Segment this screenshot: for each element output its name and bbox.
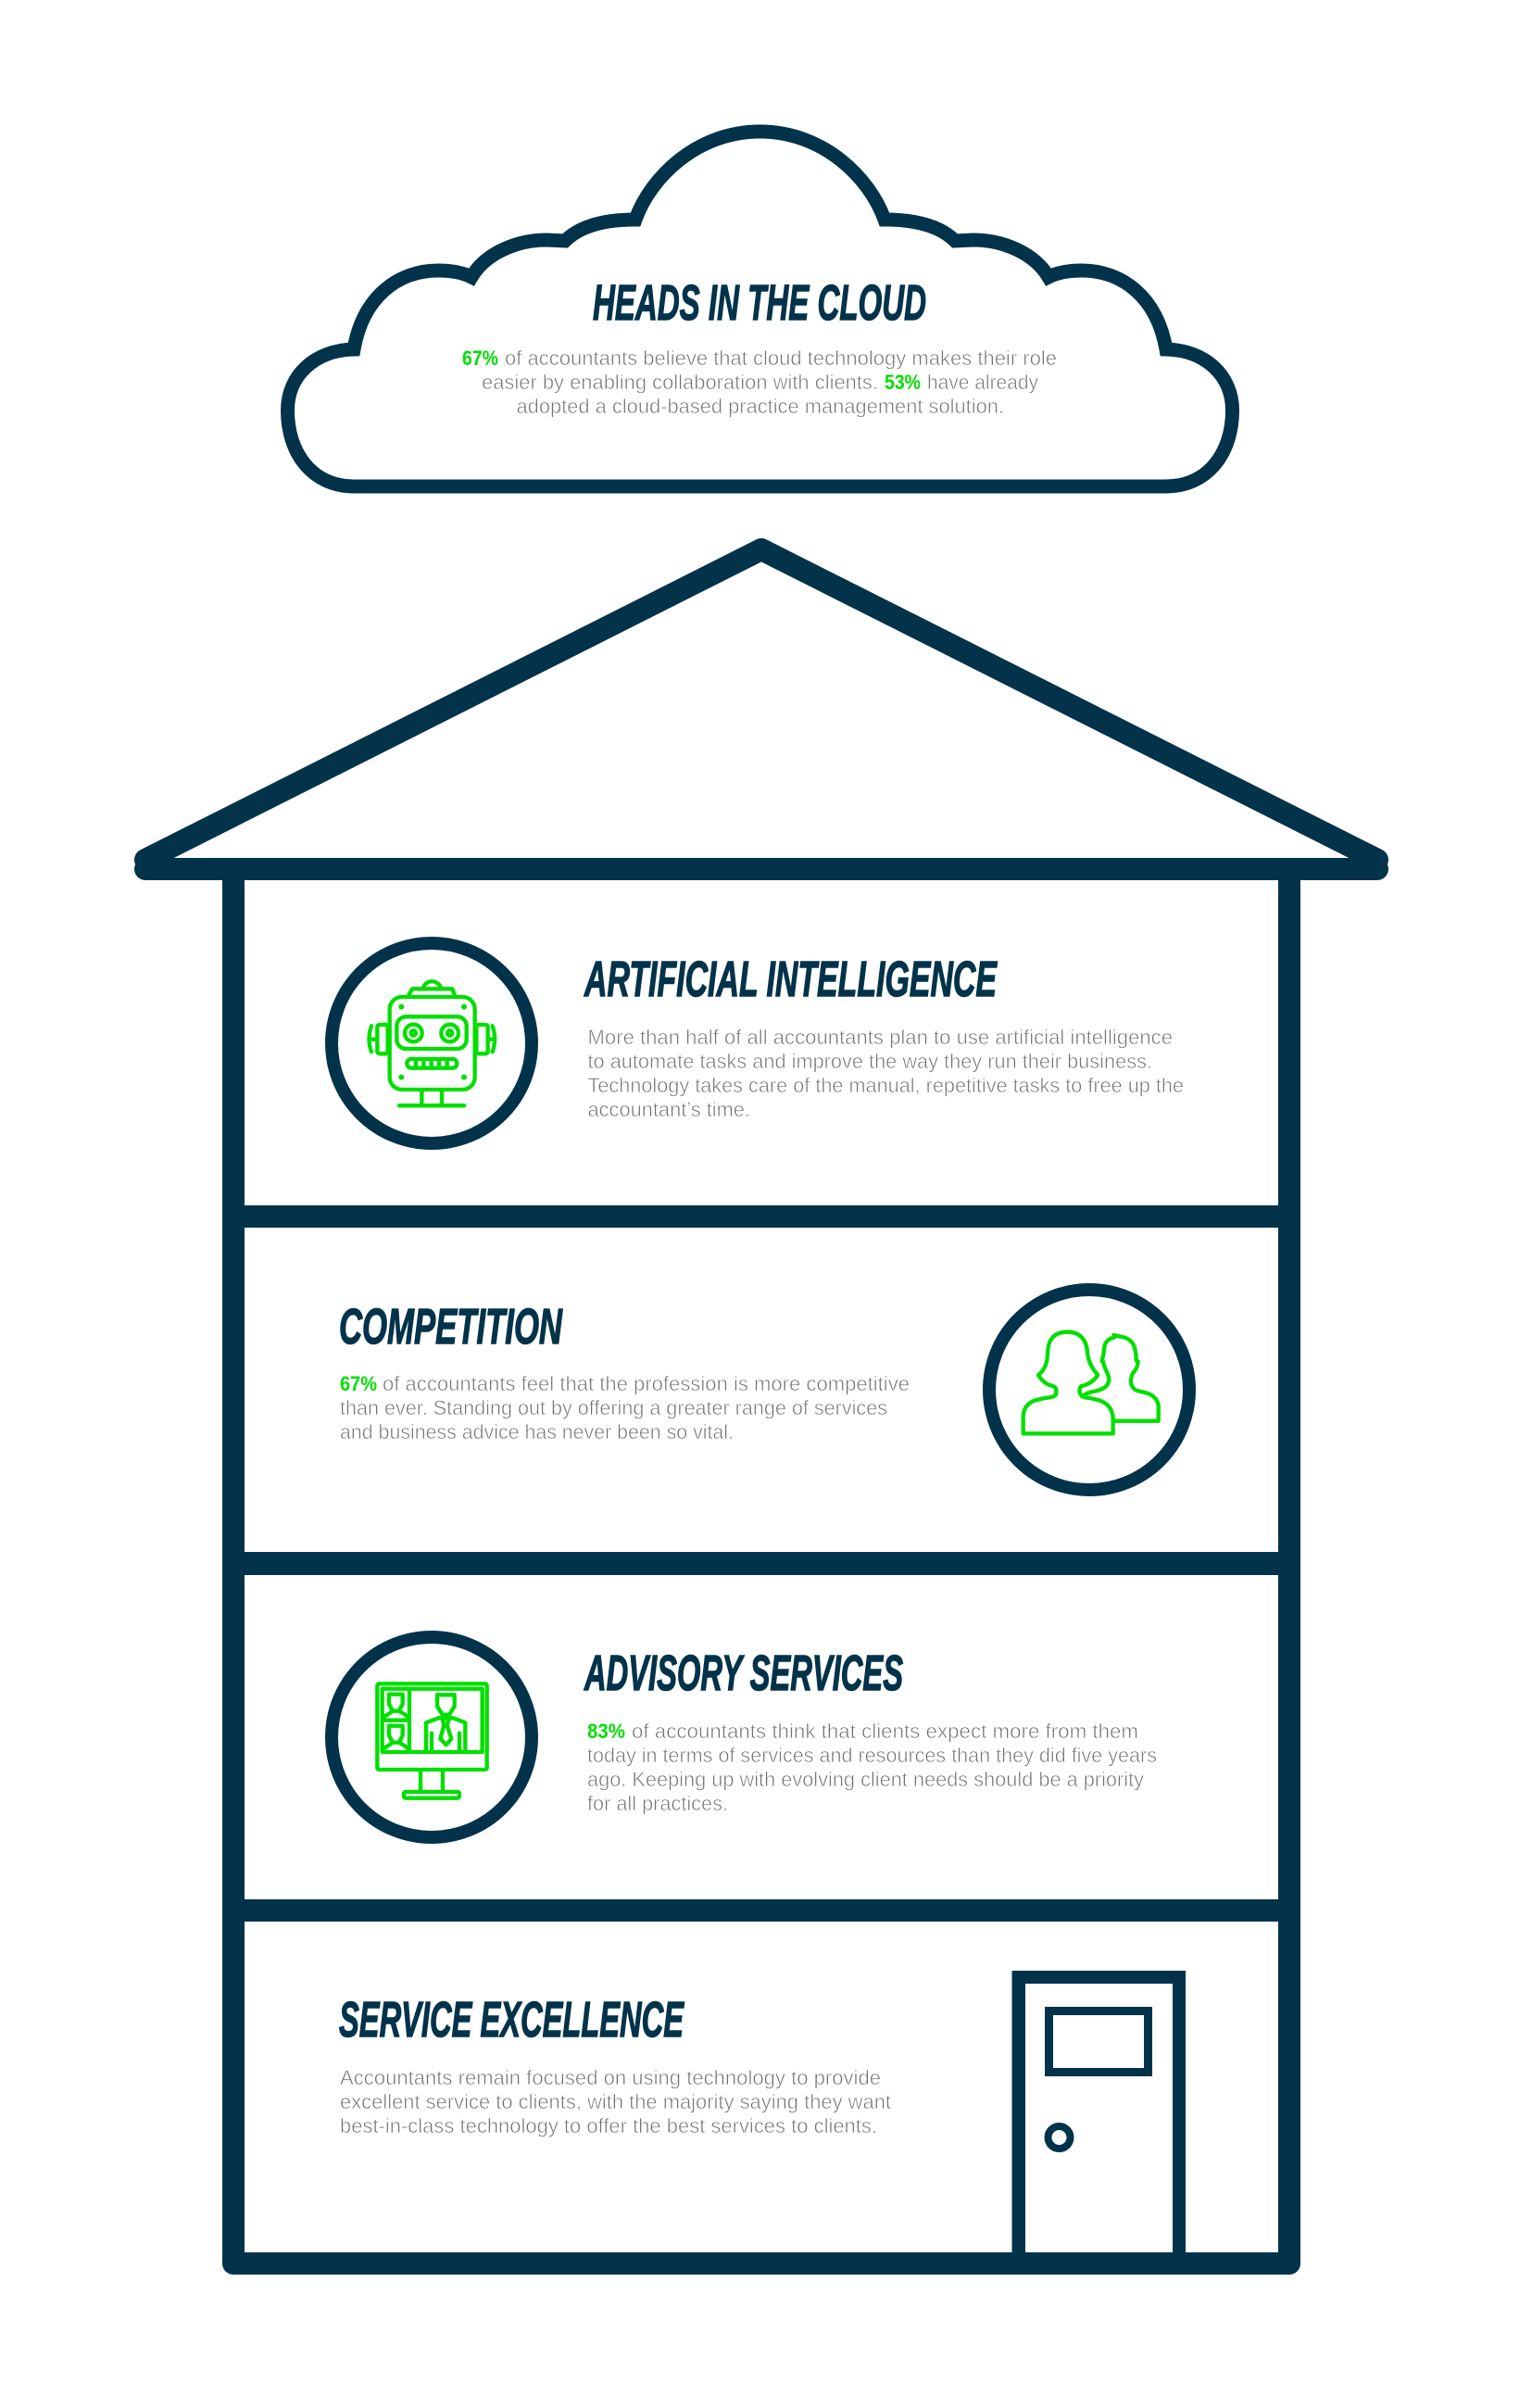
text block: service excellence: [340, 2066, 891, 2137]
roof outline: [145, 549, 1377, 869]
text block: service excellence: Accountants remain focused on using technology to provide: [340, 2066, 881, 2089]
text block: competition: [340, 1372, 910, 1444]
text block: artificial intelligence: [587, 1026, 1184, 1121]
text block: artificial intelligence: Technology takes care of the manual, repetitive tasks to free up the: [587, 1074, 1184, 1097]
panel: service excellence: [339, 1971, 1186, 2253]
text block: competition: 67%: [340, 1372, 377, 1395]
panel: cloud: [287, 132, 1232, 486]
cloud text block: of accountants believe that cloud technology makes their role: [505, 347, 1057, 370]
floor dividers: [233, 1205, 1289, 1922]
cloud text block: 53%: [885, 371, 921, 394]
text block: artificial intelligence: accountant’s time.: [587, 1098, 750, 1121]
cloud text block: easier by enabling collaboration with clients.: [482, 371, 878, 394]
text block: service excellence: best-in-class technology to offer the best services to clients.: [340, 2114, 877, 2137]
cloud heading: HEADS IN THE CLOUD: [593, 275, 926, 331]
cloud outline: [287, 132, 1232, 486]
text block: advisory services: 83%: [587, 1720, 625, 1743]
text block: artificial intelligence: to automate tasks and improve the way they run their business.: [587, 1050, 1152, 1073]
house structure: [145, 549, 1377, 2263]
door window: [1045, 2007, 1152, 2076]
text block: advisory services: ago. Keeping up with evolving client needs should be a priority: [587, 1768, 1144, 1791]
heading: artificial intelligence: ARTIFICIAL INTELLIGENCE: [584, 952, 998, 1007]
icon: door: [1011, 1971, 1186, 2253]
icon: video call monitor in circle: [332, 1637, 532, 1837]
walls and ground floor: [233, 869, 1289, 2263]
heading: service excellence: SERVICE EXCELLENCE: [339, 1992, 684, 2048]
text block: advisory services: [587, 1720, 1157, 1815]
panel: competition: [339, 1290, 1189, 1490]
icon: two people in circle: [989, 1290, 1189, 1490]
cloud text block: have already: [927, 371, 1038, 394]
door knob: [1049, 2126, 1071, 2149]
text block: service excellence: excellent service to clients, with the majority saying they want: [340, 2090, 891, 2113]
panel: advisory services: [332, 1637, 1157, 1837]
cloud text block: 67%: [462, 347, 498, 370]
icon: robot in circle: [332, 943, 532, 1143]
text block: advisory services: today in terms of services and resources than they did five years: [587, 1744, 1157, 1767]
text block: advisory services: for all practices.: [587, 1792, 728, 1815]
text block: artificial intelligence: More than half of all accountants plan to use artificial intelligence: [587, 1026, 1173, 1049]
cloud text block: [462, 347, 1057, 418]
panel: artificial intelligence: [332, 943, 1184, 1143]
heading: advisory services: ADVISORY SERVICES: [584, 1645, 903, 1701]
text block: advisory services: of accountants think that clients expect more from them: [632, 1720, 1138, 1743]
text block: competition: of accountants feel that the profession is more competitive: [383, 1372, 910, 1395]
text block: competition: than ever. Standing out by offering a greater range of services: [340, 1396, 887, 1419]
text block: competition: and business advice has never been so vital.: [340, 1420, 734, 1444]
cloud text block: adopted a cloud-based practice management solution.: [517, 395, 1004, 418]
heading: competition: COMPETITION: [339, 1299, 563, 1355]
